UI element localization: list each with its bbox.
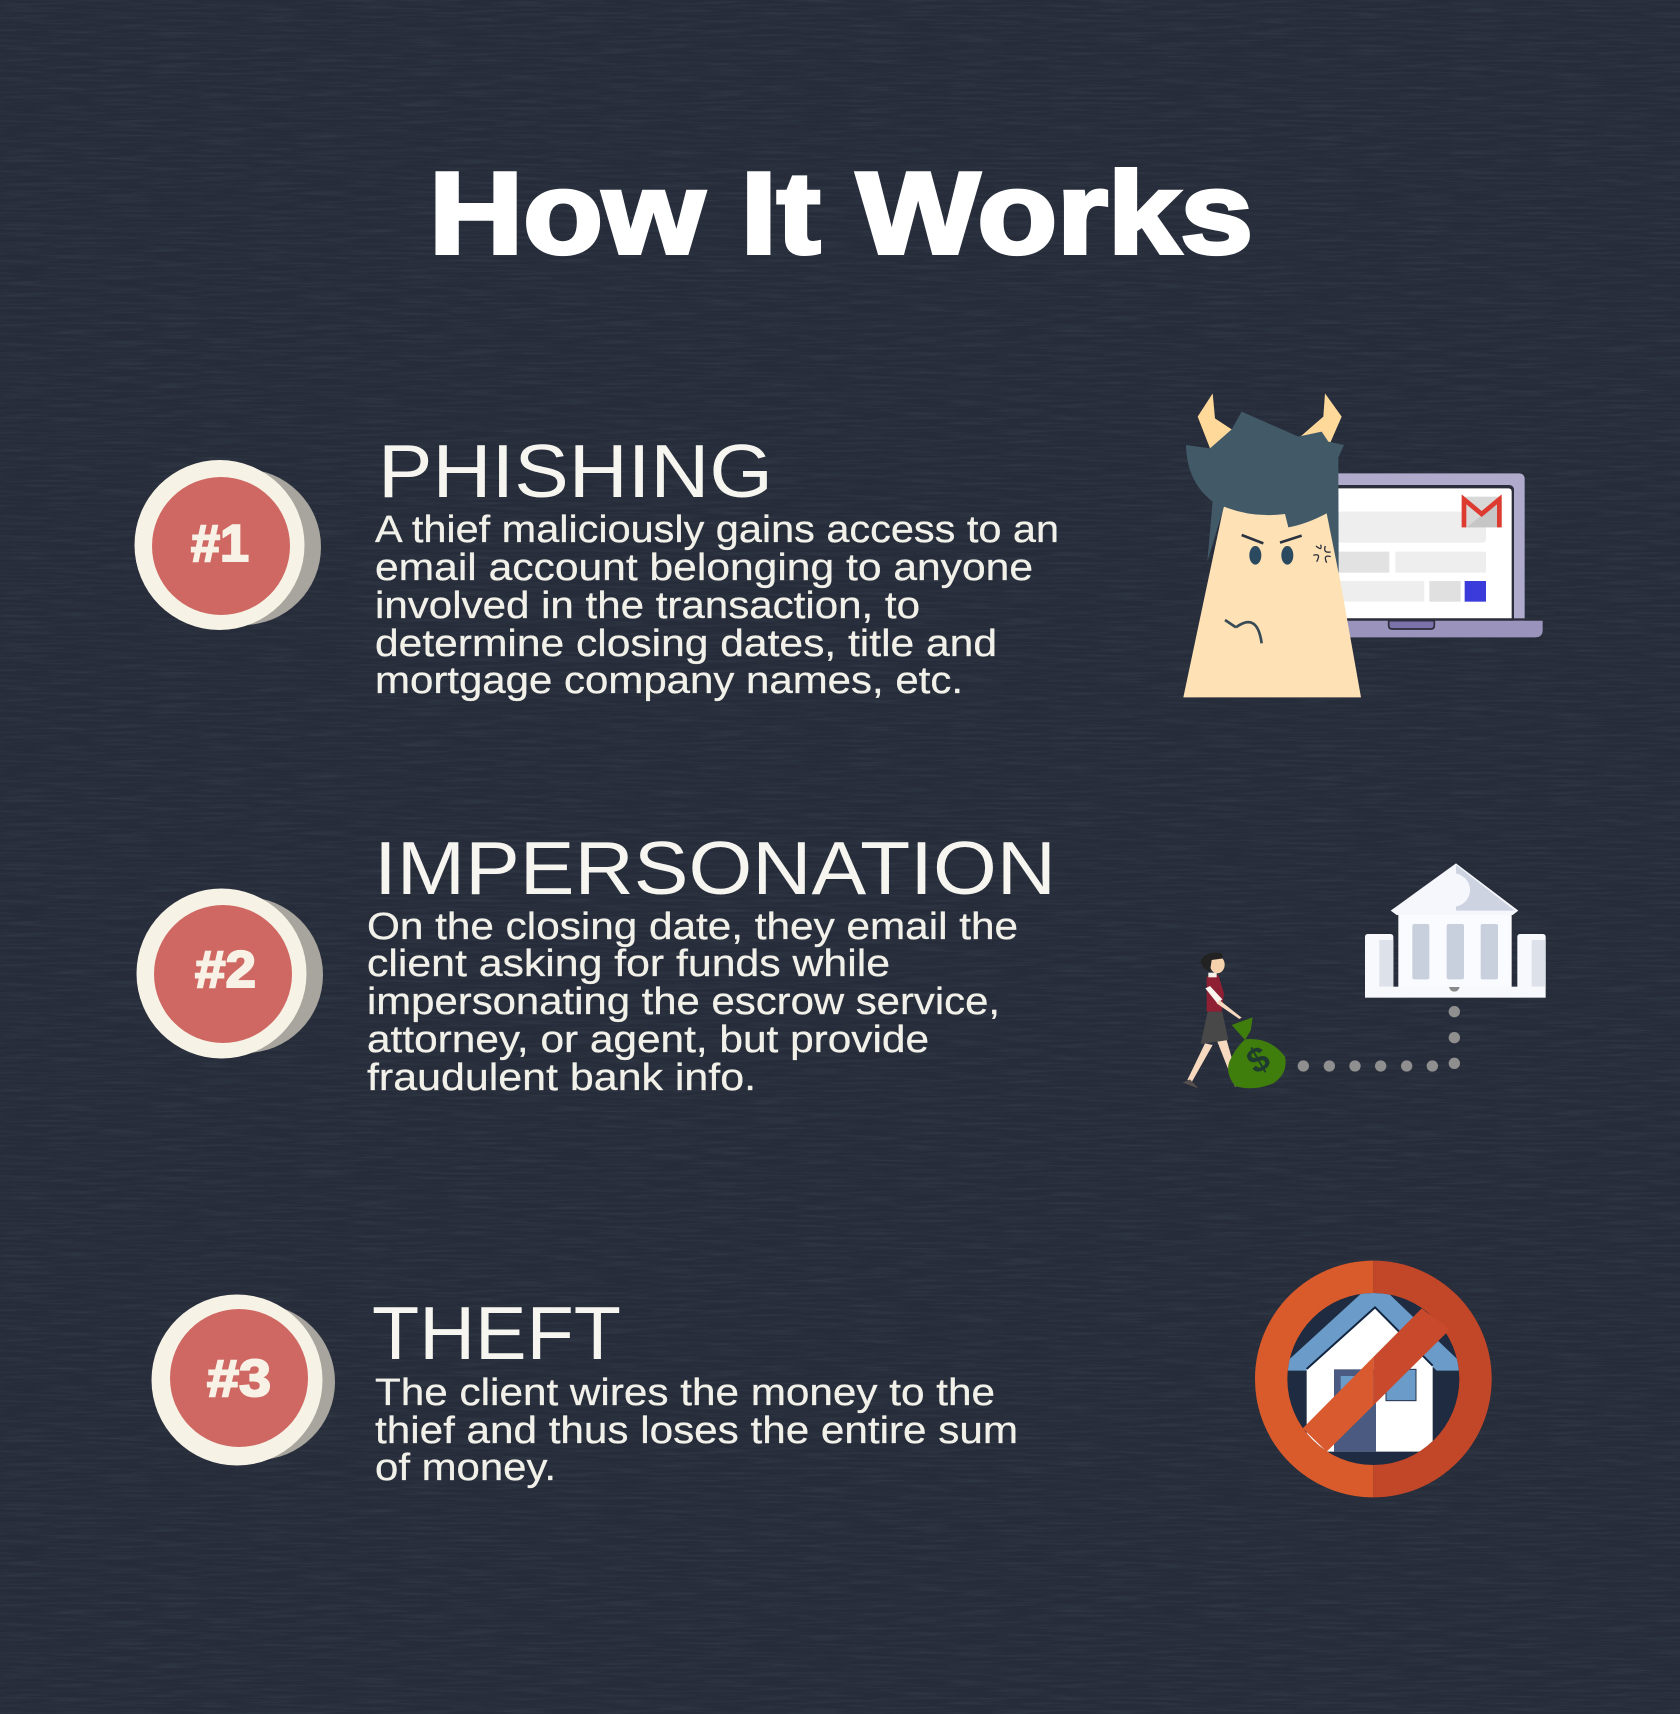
text block: phishing description: involved in the transaction, to (375, 585, 920, 627)
text block: impersonation description: impersonating the escrow service, (367, 981, 1000, 1023)
panel: phishing (134, 393, 1543, 702)
hair (1186, 412, 1344, 573)
icon: money bag: $ (1240, 1038, 1276, 1082)
text block: impersonation description: client asking for funds while (367, 943, 890, 985)
icon: house with prohibition sign (1255, 1261, 1492, 1497)
woman (1183, 953, 1242, 1088)
panel: impersonation (136, 826, 1546, 1099)
badge #1 (134, 460, 321, 630)
text block: phishing description: email account belonging to anyone (375, 547, 1033, 589)
heading: phishing: PHISHING (378, 429, 773, 513)
text block: impersonation description: On the closing date, they email the (367, 906, 1018, 948)
prohibition sign (1255, 1261, 1492, 1497)
icon: bank (1365, 863, 1546, 998)
text block: impersonation description: attorney, or agent, but provide (367, 1019, 929, 1061)
icon: house (1287, 1290, 1460, 1452)
badge #2: #2 (195, 941, 256, 999)
badge #1: #1 (191, 515, 249, 573)
text block: impersonation description (367, 906, 1018, 1099)
heading: impersonation: IMPERSONATION (374, 826, 1056, 910)
icon: money bag (1228, 1017, 1286, 1088)
text block: impersonation description: fraudulent bank info. (367, 1057, 756, 1099)
text block: theft description: The client wires the money to the (375, 1372, 995, 1414)
icon: woman dragging money bag to bank (1183, 863, 1546, 1088)
icon: gmail logo (1462, 497, 1502, 527)
text block: phishing description: mortgage company names, etc. (375, 660, 963, 702)
text block: theft description: of money. (375, 1447, 556, 1489)
badge #3 (152, 1294, 335, 1466)
body (1183, 505, 1361, 697)
dotted path (1298, 1006, 1460, 1072)
badge #3: #3 (207, 1350, 271, 1408)
title: How It Works (429, 148, 1253, 278)
panel: theft (152, 1261, 1492, 1497)
horns (1198, 393, 1342, 450)
text block: theft description (375, 1372, 1018, 1489)
text block: theft description: thief and thus loses the entire sum (375, 1410, 1018, 1452)
badge #2 (136, 888, 323, 1058)
text block: phishing description: A thief maliciously gains access to an (375, 509, 1059, 551)
icon: angry devil with laptop (1183, 393, 1543, 697)
text block: phishing description (375, 509, 1059, 702)
text block: phishing description: determine closing dates, title and (375, 623, 997, 665)
heading: theft: THEFT (372, 1291, 621, 1375)
face (1225, 535, 1331, 643)
laptop (1330, 473, 1543, 637)
